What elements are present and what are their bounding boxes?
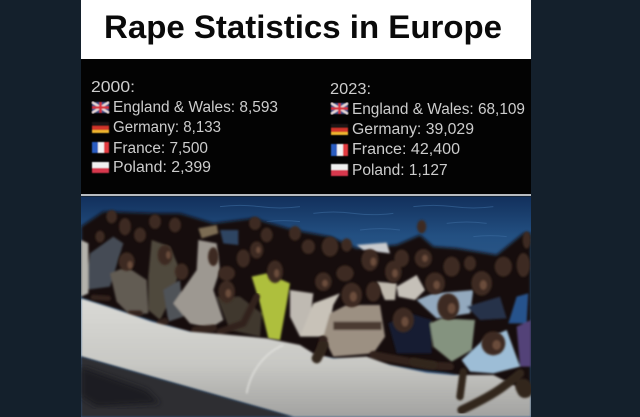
icon: Poland flag <box>331 164 348 176</box>
title banner <box>81 0 531 59</box>
faces <box>95 210 531 355</box>
icon: UK flag <box>331 103 348 114</box>
column: 2000 statistics: Poland: 2,399 <box>113 159 211 176</box>
column: 2023 statistics: Germany: 39,029 <box>352 121 474 138</box>
column: 2000 statistics <box>91 79 278 176</box>
title: Rape Statistics in Europe <box>104 9 502 45</box>
divider between statistics and photo <box>81 194 531 196</box>
column: 2023 statistics: Poland: 1,127 <box>352 162 448 179</box>
icon: Poland flag <box>92 162 109 173</box>
icon: Germany flag <box>92 122 109 133</box>
icon: France flag <box>331 144 348 156</box>
crowd mass <box>81 212 531 393</box>
icon: UK flag <box>92 102 109 113</box>
sea ripples <box>220 205 507 237</box>
hands on hull <box>317 345 525 410</box>
column: 2000 statistics: 2000: <box>91 79 135 96</box>
column: 2000 statistics: France: 7,500 <box>113 140 208 157</box>
column: 2000 statistics: England & Wales: 8,593 <box>113 99 278 116</box>
inflatable boat hull <box>81 298 531 417</box>
icon: Germany flag <box>331 124 348 135</box>
arms <box>93 297 450 367</box>
column: 2023 statistics: 2023: <box>330 81 371 98</box>
column: 2023 statistics <box>330 81 525 179</box>
right edge of photo <box>531 190 640 417</box>
column: 2023 statistics: France: 42,400 <box>352 141 460 158</box>
column: 2023 statistics: England & Wales: 68,109 <box>352 101 525 118</box>
photo: crowded migrant boat at sea <box>81 197 531 417</box>
face highlights <box>127 247 501 350</box>
panel: statistics <box>81 59 531 194</box>
left edge of photo <box>0 190 81 417</box>
clothing <box>81 225 531 373</box>
column: 2000 statistics: Germany: 8,133 <box>113 119 221 136</box>
icon: France flag <box>92 142 109 153</box>
dark water foreground <box>81 357 293 417</box>
